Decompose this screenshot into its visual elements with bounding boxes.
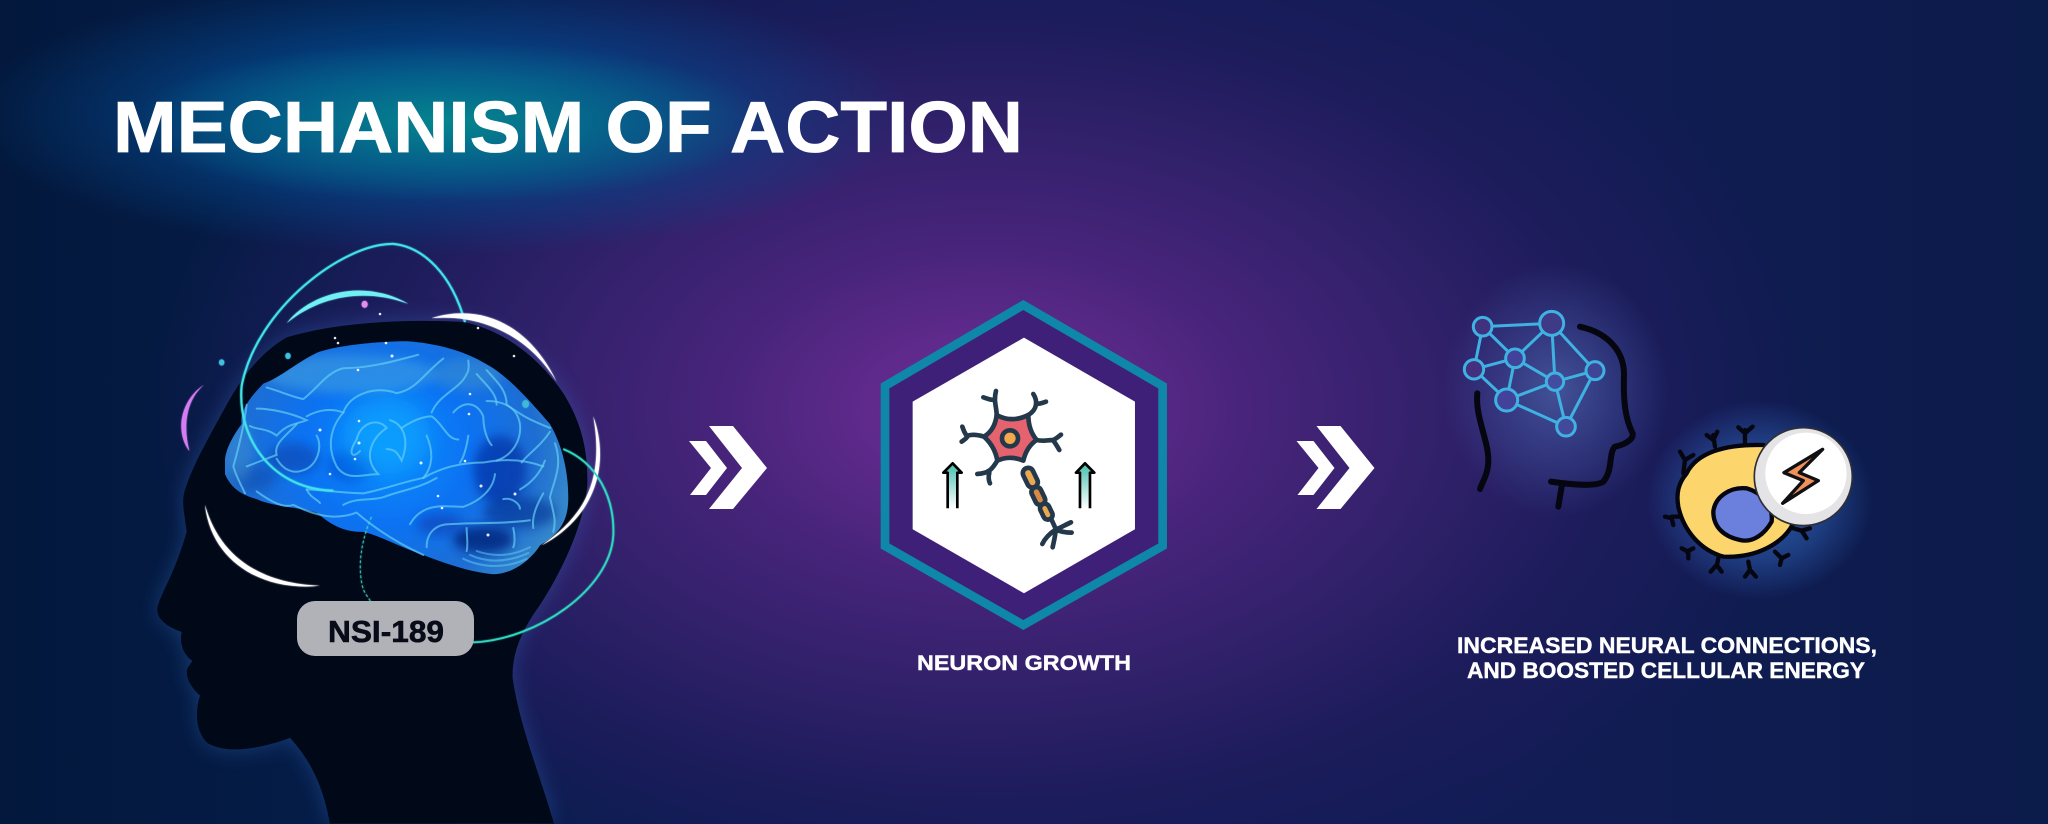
neuron growth hexagon	[885, 305, 1163, 625]
brain	[225, 341, 568, 574]
brain folds	[233, 355, 558, 566]
outcome icons	[1443, 263, 1873, 600]
head and brain illustration	[157, 244, 613, 824]
icon: up arrows	[943, 463, 1094, 508]
white hexagon	[913, 338, 1135, 593]
NSI-189 label: NSI-189	[328, 614, 444, 649]
icon: head with neural network	[1443, 263, 1670, 517]
head silhouette	[157, 321, 587, 824]
label: neuron growth: NEURON GROWTH	[917, 652, 1131, 675]
icon: cell with energy bolt	[1647, 400, 1873, 600]
icon: neuron	[962, 391, 1072, 547]
title: MECHANISM OF ACTION	[113, 88, 1023, 168]
orbiting light arcs	[181, 244, 613, 642]
hexagon frame	[885, 305, 1163, 625]
arrow: neuron growth to outcomes	[1296, 426, 1374, 509]
NSI-189 label	[297, 601, 474, 656]
sparkles	[318, 313, 516, 536]
arrow: head to neuron growth	[689, 426, 767, 509]
infographic canvas	[118, 100, 1876, 824]
label: outcomes: AND BOOSTED CELLULAR ENERGY	[1467, 658, 1865, 683]
label: outcomes: INCREASED NEURAL CONNECTIONS,	[1457, 633, 1877, 658]
label: outcomes	[1457, 633, 1877, 683]
